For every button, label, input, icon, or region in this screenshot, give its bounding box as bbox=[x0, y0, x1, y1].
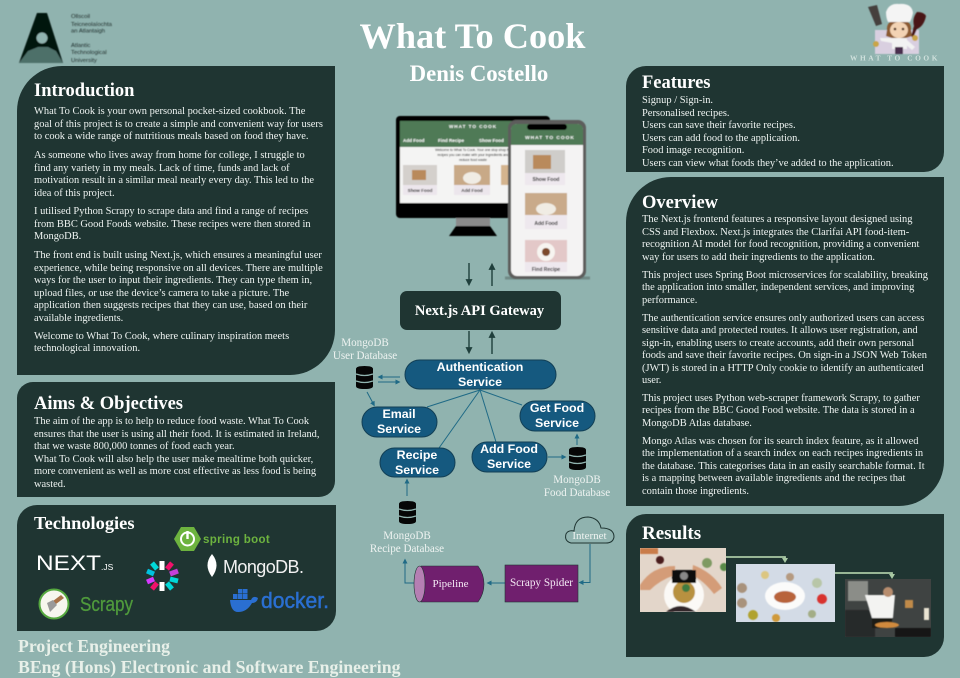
text: introduction paragraph 1: goal of this project is to create a simple and convenient way for users bbox=[34, 119, 323, 130]
logo: Atlantic Technological University: Atlantic bbox=[71, 43, 90, 49]
text: introduction paragraph 3 bbox=[34, 206, 311, 242]
monitor: Find Recipe bbox=[438, 138, 464, 143]
text: overview paragraph 5: contain those ingredients. bbox=[642, 486, 749, 497]
text: features list: Food image recognition. bbox=[642, 145, 744, 156]
text: features list: Personalised recipes. bbox=[642, 108, 730, 119]
text: overview paragraph 1: way for users to add their ingredients to the application. bbox=[642, 252, 875, 263]
text: introduction paragraph 4 bbox=[34, 250, 323, 324]
email service: Service bbox=[377, 422, 421, 436]
panel: aims and objectives bbox=[17, 382, 335, 497]
logo: scrapy: Scrapy bbox=[80, 594, 133, 616]
text: introduction paragraph 5 bbox=[34, 330, 289, 354]
text: introduction paragraph 2: find any variety in my meals. Lack of time, funds and lack of bbox=[34, 163, 290, 174]
database: recipe bbox=[370, 501, 444, 555]
logo: Atlantic Technological University bbox=[18, 12, 113, 64]
logo: Atlantic Technological University: University bbox=[71, 58, 97, 64]
text: introduction paragraph 3: MongoDB. bbox=[34, 231, 81, 242]
logo: next.js: NEXT bbox=[36, 552, 101, 575]
monitor: Show Food bbox=[479, 138, 504, 143]
logo: Atlantic Technological University: Teicneolaíochta bbox=[71, 22, 113, 28]
text: features list: Users can view what foods they’ve added to the application. bbox=[642, 158, 894, 169]
text: introduction paragraph 3: from BBC Good Foods website. These recipes were then stored in bbox=[34, 219, 311, 230]
text: overview paragraph 5 bbox=[642, 436, 925, 497]
text: introduction paragraph 5: Welcome to What To Cook, where culinary inspiration meets bbox=[34, 330, 289, 342]
image: photographing food bbox=[640, 548, 728, 615]
database: food: MongoDB bbox=[553, 474, 601, 486]
text: overview paragraph 1 bbox=[642, 214, 920, 263]
database: user: MongoDB bbox=[341, 337, 389, 349]
footer: course details bbox=[18, 636, 400, 677]
author name: Denis Costello bbox=[410, 61, 548, 86]
logo: mongodb: MongoDB. bbox=[223, 557, 304, 577]
text: overview paragraph 2: the application into smaller, independent services, and improving bbox=[642, 282, 914, 293]
phone bbox=[505, 120, 590, 279]
cloud: internet: Internet bbox=[572, 530, 607, 542]
database: recipe: MongoDB bbox=[383, 530, 431, 542]
text: overview paragraph 2: This project uses Spring Boot microservices for scalability, breaking bbox=[642, 270, 928, 280]
panel: features bbox=[626, 66, 944, 172]
text: overview paragraph 1: recognition AI model for food recognition, providing a convenient bbox=[642, 239, 919, 250]
text: features list: Users can save their favorite recipes. bbox=[642, 120, 796, 131]
cloud: internet bbox=[566, 517, 614, 543]
text: overview paragraph 3 bbox=[642, 312, 927, 386]
monitor bbox=[396, 116, 550, 236]
text: features list bbox=[642, 95, 894, 169]
monitor: WHAT TO COOK bbox=[449, 124, 497, 129]
api gateway box: Next.js API Gateway bbox=[415, 303, 545, 319]
recipe service bbox=[380, 448, 455, 477]
phone: WHAT TO COOK bbox=[525, 135, 575, 141]
architecture diagram bbox=[333, 263, 614, 602]
title: What To Cook bbox=[360, 16, 585, 56]
text: overview paragraph 3: sensitive data and protected routes. It allows user registration, and bbox=[642, 325, 918, 336]
get food service: Service bbox=[535, 416, 579, 430]
text: introduction paragraph 2 bbox=[34, 150, 314, 199]
text: features list: Users can add food to the application. bbox=[642, 133, 800, 144]
text: aims body: ensures that the user is using all their food. It is estimated in Ireland, bbox=[34, 429, 320, 440]
text: overview paragraph 5: Mongo Atlas was chosen for its search index feature, as it allowed bbox=[642, 436, 919, 446]
heading: aims and objectives: Aims & Objectives bbox=[34, 394, 183, 414]
authentication service: Authentication bbox=[437, 360, 523, 374]
panel: technologies bbox=[17, 505, 336, 631]
text: introduction paragraph 4: experience, while being responsive on all devices. There are multiple bbox=[34, 263, 323, 274]
recipe service: Recipe bbox=[397, 448, 437, 462]
text: introduction paragraph 2: idea of this project. bbox=[34, 188, 115, 199]
text: overview paragraph 4: MongoDB Atlas database. bbox=[642, 418, 752, 429]
text: introduction paragraph 2: As someone who lives away from home for college, I struggle to bbox=[34, 150, 305, 161]
authentication service: Service bbox=[458, 375, 502, 389]
phone: Find Recipe bbox=[532, 267, 560, 273]
database: user: User Database bbox=[333, 350, 397, 362]
connector lines bbox=[367, 377, 590, 583]
text: aims body bbox=[34, 416, 320, 490]
text: overview paragraph 4 bbox=[642, 392, 920, 429]
text: overview paragraph 3: sign-in, enabling users to create accounts, add their own personal bbox=[642, 338, 914, 349]
logo: spring boot: spring boot bbox=[203, 534, 270, 546]
monitor: recipes you can make with your ingredients and bbox=[437, 153, 509, 157]
app screenshot: desktop and phone bbox=[395, 115, 590, 280]
phone: Add Food bbox=[534, 221, 558, 227]
database: food bbox=[544, 447, 610, 499]
scrapy spider box: Scrapy Spider bbox=[510, 577, 573, 589]
api gateway box bbox=[400, 291, 561, 330]
image: chef cooking bbox=[845, 579, 931, 637]
monitor: Add Food bbox=[461, 188, 483, 193]
image: plated dish with ingredients bbox=[736, 564, 835, 622]
heading: overview: Overview bbox=[642, 193, 718, 213]
logo: next.js: .JS bbox=[101, 562, 114, 572]
text: introduction paragraph 4: available ingredients. bbox=[34, 313, 123, 324]
logo: docker bbox=[230, 588, 329, 613]
text: introduction paragraph 3: I utilised Python Scrapy to scrape data and find a range of recipes bbox=[34, 206, 308, 217]
panel: introduction bbox=[17, 66, 335, 375]
recipe service: Service bbox=[395, 463, 439, 477]
pipeline cylinder bbox=[414, 566, 484, 602]
text: overview paragraph 4: This project uses Python web-scraper framework Scrapy, to gather bbox=[642, 392, 920, 404]
text: overview paragraph 4: recipes from the BBC Good Food website. The data is stored in a bbox=[642, 405, 915, 416]
database: recipe: Recipe Database bbox=[370, 543, 444, 555]
logo: chef mascot bbox=[850, 3, 940, 62]
panel: results bbox=[626, 514, 944, 657]
email service: Email bbox=[382, 407, 416, 421]
get food service bbox=[520, 401, 595, 431]
text: overview paragraph 3: The authentication service ensures only authorized users can access bbox=[642, 312, 924, 324]
monitor: Show Food bbox=[408, 188, 433, 193]
text: overview paragraph 3: (JWT) is stored in a HTTP Only cookie to identify an authenticated bbox=[642, 363, 924, 374]
email service bbox=[362, 407, 437, 437]
text: aims body: The aim of the app is to help to reduce food waste. What To Cook bbox=[34, 416, 309, 427]
text: introduction paragraph 4: ways for the user to input their ingredients. They can type them in, bbox=[34, 275, 312, 286]
text: introduction paragraph 5: technological innovation. bbox=[34, 343, 140, 354]
text: introduction paragraph 1 bbox=[34, 106, 323, 142]
text: introduction paragraph 2: motivation result in a similar meal nearly every day. This led to the bbox=[34, 175, 314, 186]
text: overview paragraph 5: is a mapping between available ingredients and the recipes that bbox=[642, 473, 905, 484]
monitor: reduce food waste bbox=[459, 158, 487, 162]
text: overview paragraph 5: the database. This categorises data in an easily searchable format. It bbox=[642, 461, 925, 472]
database: food: Food Database bbox=[544, 487, 610, 499]
add food service: Add Food bbox=[480, 442, 538, 456]
heading: features: Features bbox=[642, 73, 710, 93]
panel: overview bbox=[626, 177, 944, 506]
monitor: Welcome to What To Cook. Your one stop shop for bbox=[435, 148, 512, 152]
text: introduction paragraph 4: The front end is built using Next.js, which ensures a meaningful user bbox=[34, 250, 322, 261]
text: overview paragraph 5: the implementation of a search index on each recipes ingredients in bbox=[642, 448, 923, 459]
text: overview paragraph 3: user. bbox=[642, 375, 661, 386]
phone: Show Food bbox=[533, 177, 559, 183]
text: aims body: What To Cook will also help the user make mealtime both quicker, bbox=[34, 454, 313, 465]
logo: spring boot bbox=[174, 527, 270, 551]
arrows between images bbox=[726, 557, 892, 577]
technology logos bbox=[36, 527, 329, 620]
text: features list: Signup / Sign-in. bbox=[642, 95, 713, 106]
text: aims body: that we waste 800,000 tonnes of food each year. bbox=[34, 441, 235, 452]
text: overview paragraph 2: performance. bbox=[642, 295, 697, 306]
logo: Atlantic Technological University: Ollscoil bbox=[71, 14, 90, 20]
pipeline cylinder: Pipeline bbox=[432, 578, 469, 590]
logo: Atlantic Technological University: Technological bbox=[71, 50, 107, 56]
text: overview paragraph 1: CSS and Flexbox. Next.js integrates the Clarifai API food-item- bbox=[642, 227, 909, 238]
arrows: screenshot to gateway bbox=[469, 263, 492, 286]
footer: course details: BEng (Hons) Electronic and Software Engineering bbox=[18, 656, 400, 676]
authentication service bbox=[405, 360, 556, 389]
text: overview paragraph 3: foods and save their favorite recipes. On sign-in a JSON Web Token bbox=[642, 350, 927, 361]
text: introduction paragraph 4: upload files, or use the device’s camera to take a picture. The bbox=[34, 288, 289, 299]
footer: course details: Project Engineering bbox=[18, 636, 170, 656]
add food service: Service bbox=[487, 457, 531, 471]
get food service: Get Food bbox=[530, 401, 584, 415]
logo: scrapy bbox=[40, 590, 133, 618]
monitor: Add Food bbox=[403, 138, 425, 143]
logo: chef mascot: WHAT TO COOK bbox=[850, 54, 940, 62]
heading: technologies: Technologies bbox=[34, 513, 134, 533]
add food service bbox=[472, 442, 547, 472]
logo: docker: docker. bbox=[261, 588, 329, 613]
arrows: gateway to authentication bbox=[469, 331, 492, 354]
logo: Atlantic Technological University: an Atlantaigh bbox=[71, 28, 105, 34]
text: overview paragraph 2 bbox=[642, 270, 928, 306]
logo: json web token star bbox=[147, 561, 178, 591]
text: aims body: more convenient as well as more cost effective as less food is being bbox=[34, 466, 316, 477]
text: aims body: wasted. bbox=[34, 479, 66, 490]
text: introduction paragraph 1: What To Cook is your own personal pocket-sized cookbook. The bbox=[34, 106, 305, 117]
scrapy spider box bbox=[505, 565, 578, 602]
results image flow bbox=[640, 548, 931, 637]
database: user bbox=[333, 337, 397, 389]
text: introduction paragraph 1: to cook a wide range of nutritious meals based on food they have. bbox=[34, 131, 308, 142]
heading: results: Results bbox=[642, 522, 701, 544]
text: overview paragraph 1: The Next.js frontend features a responsive layout designed using bbox=[642, 214, 912, 225]
heading: introduction: Introduction bbox=[34, 81, 134, 101]
text: introduction paragraph 4: application then suggests recipes that they can use, based on their bbox=[34, 300, 307, 311]
